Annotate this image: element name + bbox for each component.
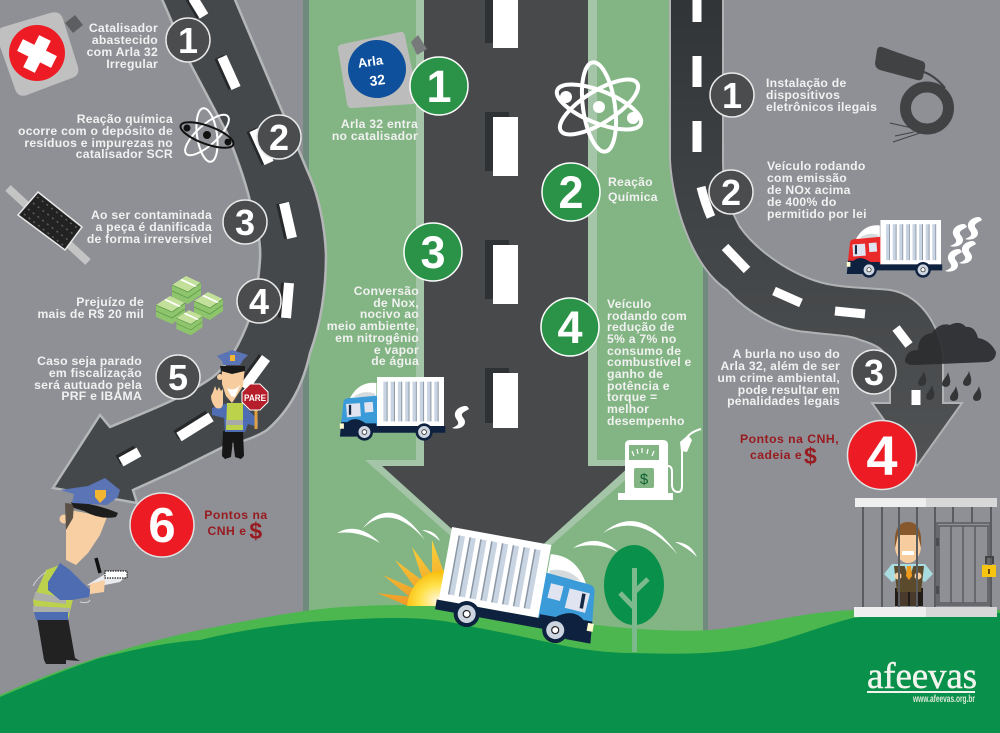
text: left step 2: ocorre com o depósito de <box>18 124 173 138</box>
text: left step 5: PRF e IBAMA <box>61 389 142 403</box>
circle 5 left: 5 <box>168 357 188 398</box>
circle 1 right: 1 <box>722 75 742 116</box>
text: left step 5: em fiscalização <box>49 366 142 380</box>
text: right step 1 <box>766 76 877 114</box>
icon: fuel pump: $ <box>640 471 649 488</box>
text: left step 5: Caso seja parado <box>37 354 142 368</box>
truck red <box>847 220 942 278</box>
text: right step 3: pode resultar em <box>738 383 840 397</box>
text: center step 1: Arla 32 entra <box>341 117 418 131</box>
circle 3 center: 3 <box>420 227 446 278</box>
right road with arrow <box>670 0 962 466</box>
text: left step 4: mais de R$ 20 mil <box>37 307 144 321</box>
text: center step 3: em nitrogênio <box>335 331 419 345</box>
text: left step 1: abastecido <box>92 33 158 47</box>
icon: officer writing notes <box>33 478 127 664</box>
green central band <box>303 0 708 640</box>
text: pontos na CNH left: $ <box>249 518 263 544</box>
text: left step 4: Prejuízo de <box>76 295 144 309</box>
text: center step 4: torque = <box>607 390 657 404</box>
text: right step 2: de NOx acima <box>767 183 851 197</box>
text: right step 2: de 400% do <box>767 195 837 209</box>
circle 4 left: 4 <box>249 281 269 322</box>
circle 3 right <box>852 350 896 394</box>
text: right step 2: permitido por lei <box>767 207 867 221</box>
text: left step 5 <box>34 354 142 403</box>
logo: afeevas: afeevas <box>867 656 977 697</box>
icon: small atom <box>178 107 236 163</box>
icon: fuel pump <box>618 429 701 500</box>
text: right step 1: Instalação de <box>766 76 846 90</box>
icon: canister with red X <box>0 12 83 96</box>
text: left step 3 <box>87 208 212 246</box>
circle 2 center <box>542 163 600 221</box>
icon: illegal electronic device <box>875 47 948 142</box>
circle 3 right: 3 <box>864 352 884 393</box>
left road with arrow <box>53 0 326 503</box>
circle 6 red <box>130 493 194 557</box>
circle 4 center: 4 <box>557 302 583 353</box>
text: center step 3: de Nox, <box>373 296 419 310</box>
text: pontos na CNH left <box>204 508 268 544</box>
left road dashes <box>118 0 292 462</box>
text: left step 2: catalisador SCR <box>76 147 173 161</box>
text: center step 4: 5% a 7% no <box>607 332 677 346</box>
text: center step 1 <box>332 117 418 143</box>
text: center step 4: melhor <box>607 402 649 416</box>
text: right step 3 <box>717 347 840 408</box>
text: pontos na CNH right: $ <box>804 443 817 469</box>
text: pontos na CNH right: Pontos na CNH, <box>740 432 839 446</box>
text: left step 2: resíduos e impurezas no <box>24 136 173 150</box>
text: center step 2: Reação <box>608 175 653 189</box>
circle 2 left: 2 <box>269 117 289 158</box>
circle 1 left <box>166 18 210 62</box>
text: left step 2 <box>18 112 173 161</box>
text: left step 1: com Arla 32 <box>87 45 158 59</box>
text: center step 3: Conversão <box>354 284 419 298</box>
icon: officer with stop sign: PARE <box>244 393 266 403</box>
right road dashes <box>697 0 916 405</box>
text: pontos na CNH right: cadeia e <box>750 448 802 462</box>
truck left <box>340 377 445 441</box>
text: right step 3: A burla no uso do <box>733 347 840 361</box>
text: center step 4: combustível e <box>607 355 692 369</box>
icon: contaminated catalyst <box>8 188 88 262</box>
main truck <box>433 527 606 650</box>
text: center step 4: potência e <box>607 379 670 393</box>
text: center step 4: desempenho <box>607 414 685 428</box>
text: pontos na CNH right <box>740 432 839 469</box>
text: center step 3: nocivo ao <box>360 307 419 321</box>
center road dashes <box>485 0 518 428</box>
circle 2 right <box>709 170 753 214</box>
text: center step 2: Química <box>608 190 658 204</box>
text: left step 3: a peça é danificada <box>95 220 212 234</box>
text: center step 3: e vapor <box>374 343 419 357</box>
text: left step 2: Reação química <box>77 112 173 126</box>
text: pontos na CNH left: Pontos na <box>204 508 268 522</box>
text: left step 1: Irregular <box>106 57 158 71</box>
center road pale edge <box>365 0 648 585</box>
text: center step 3 <box>327 284 419 368</box>
icon: Arla 32 canister: 32 <box>368 71 386 89</box>
text: left step 4 <box>37 295 144 321</box>
circle 4 left <box>237 279 281 323</box>
text: center step 3: de água <box>371 354 419 368</box>
circle 6 red: 6 <box>148 499 176 553</box>
hill light <box>0 605 1000 733</box>
icon: Arla 32 canister: Arla <box>357 52 385 71</box>
text: right step 1: eletrônicos ilegais <box>766 100 877 114</box>
icon: money stacks <box>156 276 223 335</box>
hill dark <box>0 613 1000 733</box>
sun <box>377 540 448 606</box>
circle 1 right <box>710 73 754 117</box>
text: center step 4: ganho de <box>607 367 663 381</box>
icon: Arla 32 canister <box>338 32 427 108</box>
smoke truck left <box>452 406 469 429</box>
circle 3 left <box>223 200 267 244</box>
circle 1 center: 1 <box>426 61 452 112</box>
text: right step 1: dispositivos <box>766 88 840 102</box>
circle 2 right: 2 <box>721 172 741 213</box>
circle 1 center <box>410 57 468 115</box>
cloud right <box>573 521 697 557</box>
text: center step 4: rodando com <box>607 309 687 323</box>
text: left step 3: Ao ser contaminada <box>91 208 212 222</box>
text: center step 4: consumo de <box>607 344 681 358</box>
text: right step 3: Arla 32, além de ser <box>720 359 840 373</box>
text: pontos na CNH left: CNH e <box>207 524 247 538</box>
text: center step 2 <box>608 175 658 204</box>
icon: rain cloud <box>905 323 996 401</box>
text: right step 3: penalidades legais <box>727 394 840 408</box>
circle 1 left: 1 <box>178 20 198 61</box>
icon: officer with stop sign <box>211 350 268 459</box>
circle 5 left <box>156 355 200 399</box>
icon: jail with prisoner <box>854 498 997 617</box>
circle 4 red <box>848 420 916 490</box>
circle 2 center: 2 <box>558 167 584 218</box>
text: right step 2: com emissão <box>767 171 847 185</box>
center road with arrow <box>382 0 630 578</box>
text: left step 1 <box>87 21 158 71</box>
text: right step 2: Veículo rodando <box>767 159 866 173</box>
smoke red truck <box>945 217 982 272</box>
text: right step 2 <box>767 159 867 221</box>
text: center step 1: no catalisador <box>332 129 418 143</box>
circle 4 red: 4 <box>866 424 898 487</box>
text: center step 4: redução de <box>607 320 675 334</box>
text: center step 4: Veículo <box>607 297 651 311</box>
text: right step 3: um crime ambiental, <box>717 371 840 385</box>
icon: large atom <box>551 60 647 154</box>
circle 2 left <box>257 115 301 159</box>
text: left step 3: de forma irreversível <box>87 232 212 246</box>
text: center step 4 <box>607 297 692 428</box>
circle 3 center <box>404 223 462 281</box>
circle 3 left: 3 <box>235 202 255 243</box>
cloud left <box>337 513 440 543</box>
text: left step 5: será autuado pela <box>34 378 142 392</box>
tree <box>604 545 664 652</box>
circle 4 center <box>541 298 599 356</box>
text: center step 3: meio ambiente, <box>327 319 419 333</box>
text: left step 1: Catalisador <box>89 21 158 35</box>
